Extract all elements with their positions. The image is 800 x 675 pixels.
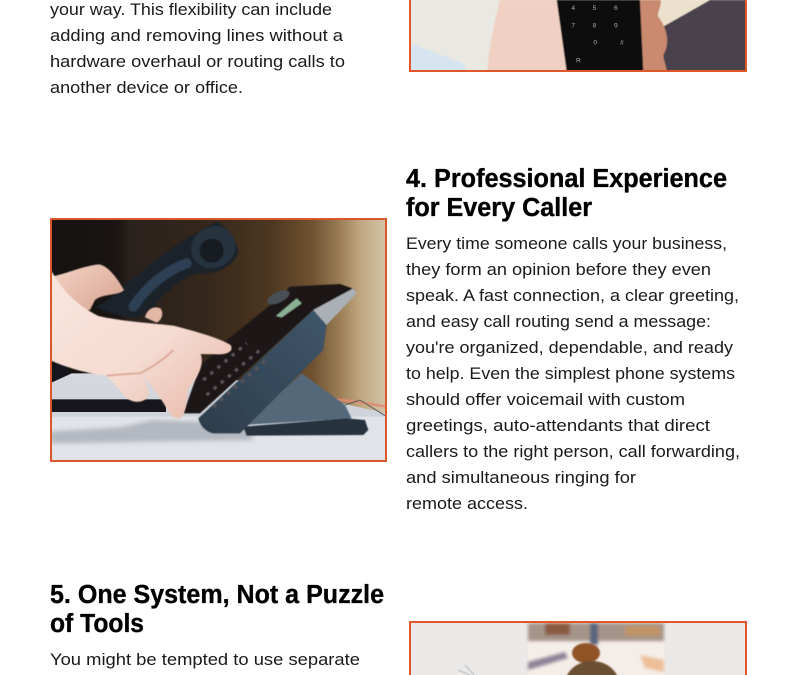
photo: person at desk with wall picture	[410, 622, 746, 675]
photo: hands dialing a desk phone	[50, 218, 387, 463]
heading: section 4: 4. Professional Experience	[406, 165, 727, 193]
text block: section 4 paragraph: Every time someone calls your business,	[406, 234, 727, 253]
text block: section 4 paragraph: remote access.	[406, 494, 528, 513]
text block: section 4 paragraph: should offer voicemail with custom	[406, 390, 685, 409]
text block: section 4 paragraph: you're organized, dependable, and ready	[406, 338, 734, 357]
photo: hand holding cordless phone: 5	[593, 5, 597, 12]
text block: section 4 paragraph: greetings, auto-attendants that direct	[406, 416, 710, 435]
photo: hand holding cordless phone: 7	[571, 22, 575, 29]
text block: section 3 closing paragraph: adding and removing lines without a	[50, 26, 344, 45]
heading: section 5: 5. One System, Not a Puzzle	[50, 581, 384, 609]
text block: section 3 closing paragraph: hardware overhaul or routing calls to	[50, 52, 345, 71]
back hand	[54, 264, 124, 311]
main hand	[50, 268, 232, 418]
photo: hand holding cordless phone	[410, 0, 747, 72]
text block: section 4 paragraph	[406, 234, 740, 513]
text block: section 5 paragraph opening: You might be tempted to use separate	[50, 650, 360, 669]
photo: hand holding cordless phone: #	[620, 40, 624, 47]
photo: hand holding cordless phone: 4	[571, 5, 575, 12]
heading: section 4: for Every Caller	[406, 194, 592, 222]
text block: section 4 paragraph: callers to the right person, call forwarding,	[406, 442, 740, 461]
photo: hand holding cordless phone: 0	[593, 40, 597, 47]
heading: section 5	[50, 581, 384, 638]
icon: phone cord	[50, 363, 166, 412]
text block: section 3 closing paragraph	[50, 0, 345, 97]
icon: handset	[95, 218, 243, 318]
text block: section 4 paragraph: and simultaneous ringing for	[406, 468, 636, 487]
text block: section 4 paragraph: speak. A fast connection, a clear greeting,	[406, 286, 739, 305]
photo: hand holding cordless phone: 8	[593, 22, 597, 29]
text block: section 3 closing paragraph: your way. This flexibility can include	[50, 0, 332, 19]
heading: section 5: of Tools	[50, 610, 144, 638]
photo: hand holding cordless phone: 6	[614, 5, 618, 12]
photo: hand holding cordless phone: R	[576, 58, 581, 65]
text block: section 4 paragraph: and easy call routing send a message:	[406, 312, 711, 331]
text block: section 3 closing paragraph: another device or office.	[50, 78, 243, 97]
photo: hand holding cordless phone: 9	[614, 22, 618, 29]
heading: section 4	[406, 165, 727, 222]
text block: section 4 paragraph: to help. Even the simplest phone systems	[406, 364, 735, 383]
text block: section 4 paragraph: they form an opinion before they even	[406, 260, 711, 279]
icon: desk phone	[183, 284, 368, 436]
